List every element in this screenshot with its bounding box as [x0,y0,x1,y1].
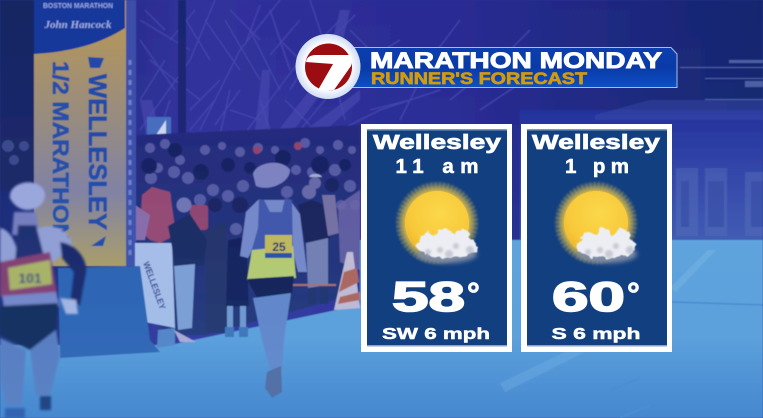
subheading: runner's forecast: RUNNER'S FORECAST [371,70,587,88]
runner number 101 (blurred foreground) [0,182,86,418]
wind: SW 6 mph [382,326,490,343]
dark spectators [205,222,228,333]
temperature [552,273,640,320]
background: building at right [520,60,763,242]
location label: Wellesley [373,132,502,154]
street sign [147,117,171,137]
time label: 1 pm [565,155,629,178]
lamp post [178,0,186,160]
temperature: 60 [552,273,625,320]
background: road [0,240,763,418]
child spectator [225,223,249,337]
title bar [348,48,677,88]
white barrier sign [135,243,175,348]
wind: S 6 mph [552,326,640,343]
forecast card: Wellesley 11 am [361,124,512,352]
traffic cone [334,252,360,310]
location label: Wellesley [532,132,661,154]
blue barrier box [58,266,160,358]
forecast card: Wellesley 1 pm [521,124,672,352]
race banner tower: BOSTON MARATHON [43,1,113,10]
temperature: 58 [392,273,465,320]
runner number 101 (blurred foreground): 101 [18,270,42,286]
temperature [392,273,480,320]
race banner tower: 1/2 MARATHON [48,61,73,241]
temperature: ° [627,276,640,312]
background: spectator crowd [135,125,360,335]
race banner tower [34,0,136,266]
icon: sun behind cloud [553,180,639,266]
race banner tower: WELLESLEY [83,74,111,230]
orange-jacket spectator [140,187,176,243]
time label: 11 am [396,155,478,178]
logo and title banner [296,34,677,99]
race banner tower: John Hancock [44,19,112,31]
heading: marathon monday: MARATHON MONDAY [370,48,662,73]
spectator in navy jacket [168,198,207,342]
icon: channel 7 logo [296,34,360,99]
temperature: ° [467,276,480,312]
runner number 25: 25 [272,240,286,254]
white barrier sign: WELLESLEY [141,260,168,311]
icon: sun behind cloud [394,180,480,266]
runner number 25 [240,163,307,398]
left dark panel [0,0,34,190]
